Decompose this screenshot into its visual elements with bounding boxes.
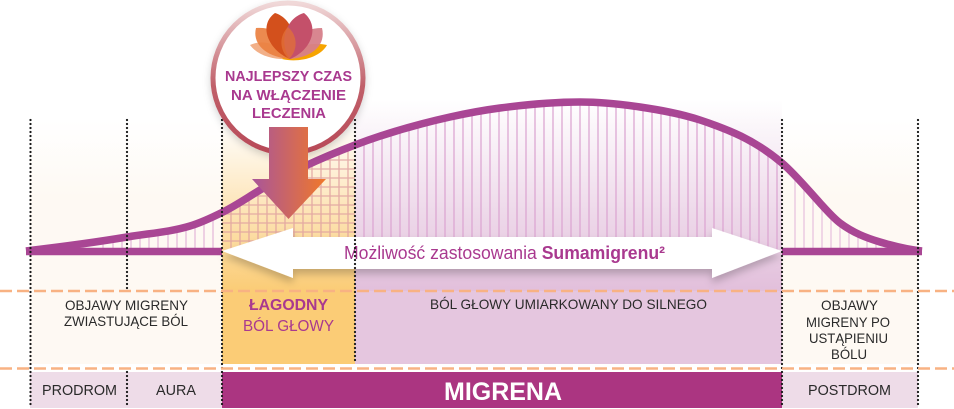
text: postdrome symptoms: BÓLU [831,346,867,362]
badge text: LECZENIA [252,105,326,122]
text: postdrome symptoms: MIGRENY PO [806,314,890,330]
text: postdrome symptoms: OBJAWY [821,297,879,313]
text: prodrome symptoms: OBJAWY MIGRENY [65,297,189,313]
badge: best time to start treatment [213,3,363,153]
phase bar [30,372,918,408]
dashed section lines [0,291,954,368]
arrow: pointing down to early treatment [252,127,326,219]
hatching under the curve [103,100,876,251]
migraine curve [26,102,922,252]
text: prodrome symptoms: ZWIASTUJĄCE BÓL [64,313,188,329]
text: postdrome symptoms: USTĄPIENIU [809,330,888,346]
phase labels: POSTDROM [808,382,891,399]
arrow label: Możliwość zastosowania Sumamigrenu² [344,243,665,263]
badge text: NAJLEPSZY CZAS [225,68,352,85]
badge text: NA WŁĄCZENIE [231,87,346,104]
text: mild headache: ŁAGODNY [249,297,328,314]
double arrow: treatment window [222,228,782,278]
phase labels: PRODROM [42,382,117,399]
badge text [225,68,352,122]
text: mild headache: BÓL GŁOWY [243,316,334,335]
phase labels: MIGRENA [444,378,562,406]
text: moderate to severe headache: BÓL GŁOWY UMIARKOWANY DO SILNEGO [430,296,707,312]
dotted phase dividers [30,120,918,408]
icon: lotus [250,13,327,60]
text: prodrome symptoms [64,297,189,329]
lower band: symptom panels [30,291,918,364]
text: postdrome symptoms [806,297,890,362]
text: mild headache [243,297,334,335]
phase labels: AURA [156,382,196,399]
upper background bands [30,100,918,291]
phase labels [42,378,891,406]
